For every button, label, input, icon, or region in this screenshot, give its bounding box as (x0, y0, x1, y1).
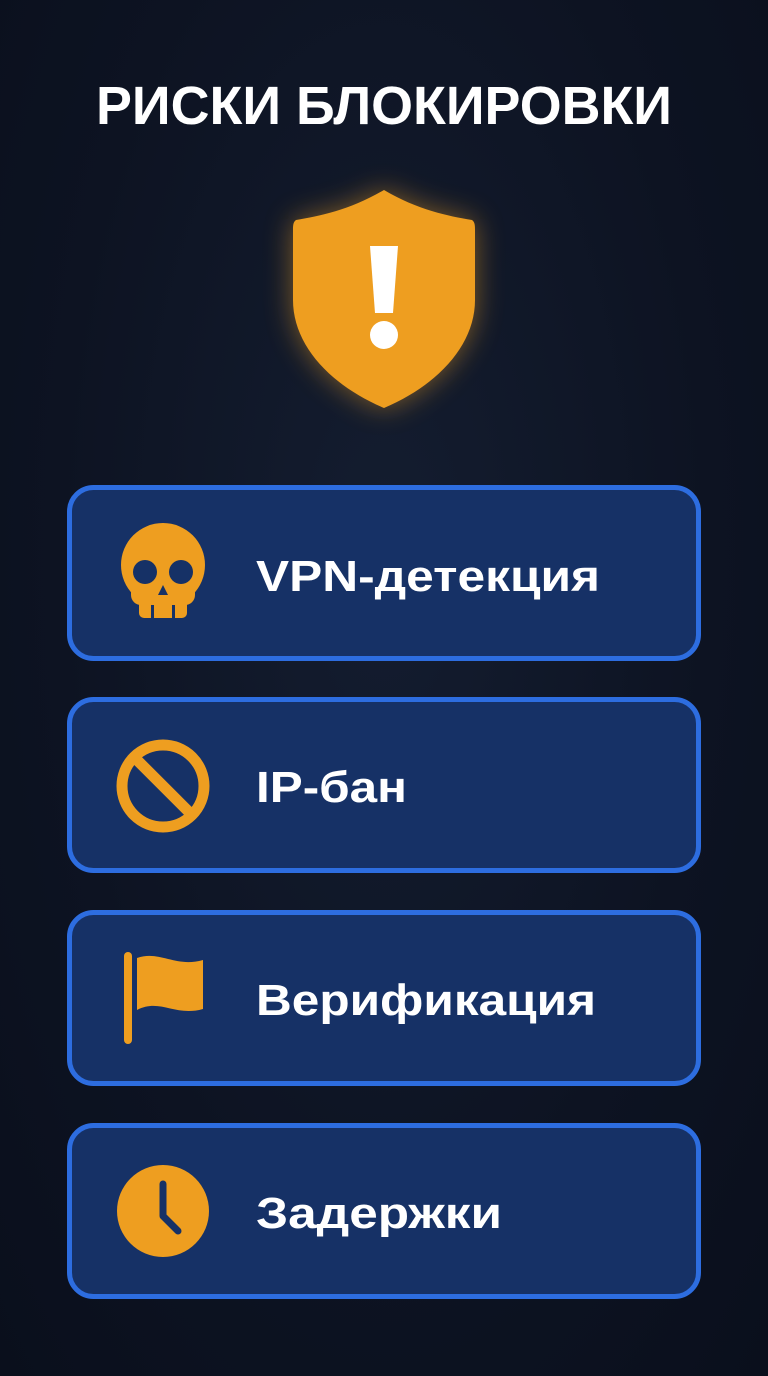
label: IP-бан: IP-бан (256, 763, 407, 812)
panel: VPN detection (70, 488, 698, 658)
panel: verification (70, 912, 698, 1084)
label: Задержки: Задержки (256, 1189, 502, 1238)
label: VPN-детекция: VPN-детекция (256, 552, 600, 601)
icon: ban (122, 745, 204, 827)
panel: IP ban (70, 700, 698, 870)
title: РИСКИ БЛОКИРОВКИ (96, 76, 672, 136)
icon: flag (124, 952, 203, 1044)
icon: clock (117, 1165, 209, 1257)
panel: delays (70, 1126, 698, 1296)
label: Верификация: Верификация (256, 976, 596, 1025)
icon: skull (121, 523, 205, 619)
icon: warning shield (293, 190, 475, 408)
